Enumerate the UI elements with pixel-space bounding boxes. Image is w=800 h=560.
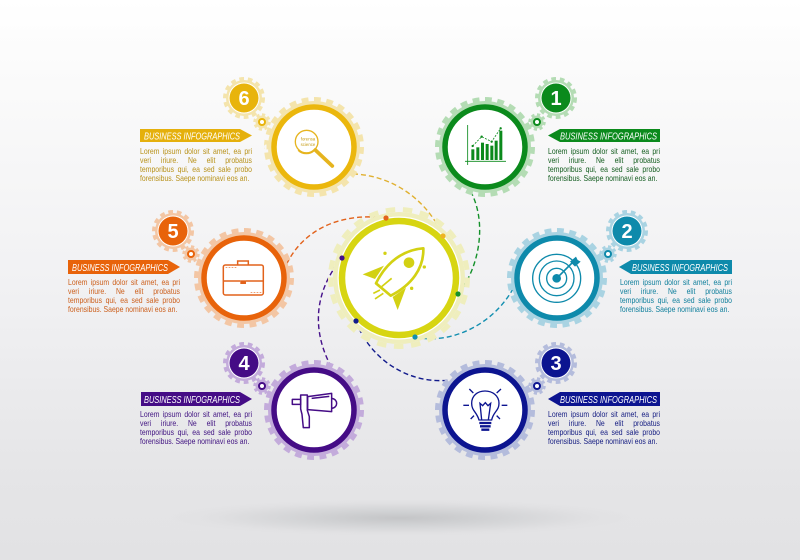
text block 5: veri iriure. Ne elit probatus (68, 286, 180, 296)
text block 3: temporibus qui, ea sed sale probo (548, 427, 660, 437)
banner 4: BUSINESS INFOGRAPHICS (144, 394, 240, 406)
banner 3 (548, 392, 660, 406)
small gear 2: 2 (621, 221, 633, 243)
text block 3: forensibus. Saepe nominavi eos an. (548, 436, 657, 446)
text block 1 (548, 146, 661, 186)
step 6: gold (140, 79, 362, 194)
small gear 5: 5 (167, 221, 179, 243)
step 4: purple (140, 344, 362, 458)
small gear 3: 3 (550, 353, 562, 375)
big gear 6 (266, 100, 362, 194)
icon: light bulb (463, 389, 507, 430)
icon: magnifier: science (301, 142, 316, 147)
text block 4: veri iriure. Ne elit probatus (140, 418, 252, 428)
connector gear 2 (600, 246, 616, 262)
icon: megaphone (292, 393, 337, 428)
banner 5 (68, 260, 180, 274)
small gear 5 (154, 212, 192, 250)
dashed connectors (284, 174, 515, 381)
banner 2 (619, 260, 732, 274)
central gear with rocket (330, 210, 468, 346)
small gear 3 (537, 344, 575, 382)
small gear 1 (537, 79, 575, 117)
step 1: green (438, 79, 661, 194)
text block 3 (548, 410, 661, 450)
banner 1: BUSINESS INFOGRAPHICS (560, 130, 657, 142)
text block 2: forensibus. Saepe nominavi eos an. (620, 304, 729, 314)
icon: briefcase (223, 261, 263, 295)
banner 2: BUSINESS INFOGRAPHICS (632, 262, 728, 274)
small gear 2 (608, 212, 646, 250)
text block 2: temporibus qui, ea sed sale probo (620, 295, 732, 305)
ground shadow (135, 497, 665, 539)
text block 3: veri iriure. Ne elit probatus (548, 418, 660, 428)
small gear 4: 4 (238, 353, 250, 375)
banner 5: BUSINESS INFOGRAPHICS (72, 262, 168, 274)
connector gear 6 (254, 114, 270, 130)
text block 6: temporibus qui, ea sed sale probo (140, 164, 252, 174)
big gear 1 (438, 100, 532, 194)
big gear 4 (266, 362, 362, 458)
text block 1: temporibus qui, ea sed sale probo (548, 164, 660, 174)
icon: rocket (363, 248, 426, 310)
text block 4: forensibus. Saepe nominavi eos an. (140, 436, 249, 446)
icon: magnifier: forensa (301, 137, 316, 142)
text block 5: temporibus qui, ea sed sale probo (68, 295, 180, 305)
step 2: teal (510, 212, 733, 326)
connector gear 5 (184, 246, 198, 262)
text block 5 (68, 278, 181, 318)
banner 1 (548, 129, 660, 142)
connector gear 4 (254, 378, 270, 394)
connector gear 3 (530, 378, 544, 394)
text block 6: forensibus. Saepe nominavi eos an. (140, 173, 249, 183)
icon: magnifier (295, 130, 332, 166)
banner 3: BUSINESS INFOGRAPHICS (560, 394, 657, 406)
small gear 4 (225, 344, 263, 382)
step 5: orange (68, 212, 292, 326)
step 3: navy (438, 344, 661, 458)
text block 1: forensibus. Saepe nominavi eos an. (548, 173, 657, 183)
text block 6 (140, 146, 253, 186)
banner 4 (141, 392, 252, 406)
big gear 5 (196, 230, 292, 326)
small gear 6 (225, 79, 263, 117)
icon: target (533, 254, 581, 302)
text block 1: veri iriure. Ne elit probatus (548, 155, 660, 165)
text block 4 (140, 410, 253, 450)
big gear 3 (438, 362, 532, 458)
big gear 2 (510, 230, 604, 326)
text block 6: veri iriure. Ne elit probatus (140, 155, 252, 165)
connector dots (339, 215, 461, 340)
connector gear 1 (530, 114, 544, 130)
small gear 1: 1 (550, 88, 562, 110)
banner 6: BUSINESS INFOGRAPHICS (144, 130, 240, 142)
small gear 6: 6 (238, 88, 250, 110)
icon: bar chart (465, 125, 506, 165)
text block 2: veri iriure. Ne elit probatus (620, 286, 732, 296)
text block 2 (620, 278, 733, 318)
text block 4: temporibus qui, ea sed sale probo (140, 427, 252, 437)
text block 5: forensibus. Saepe nominavi eos an. (68, 304, 177, 314)
